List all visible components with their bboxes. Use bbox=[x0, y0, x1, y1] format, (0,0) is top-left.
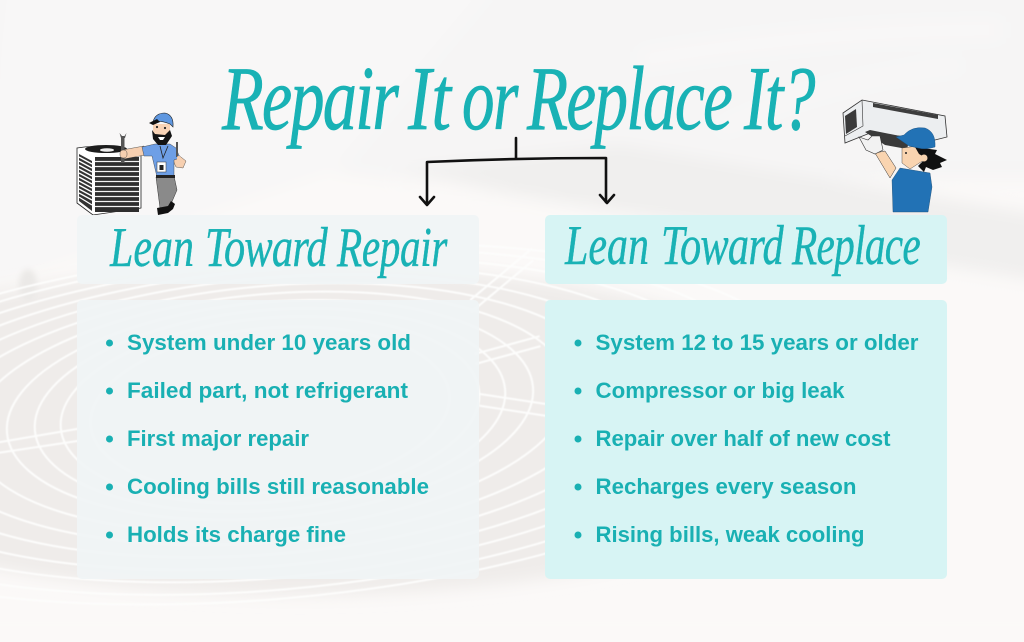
title: or bbox=[462, 50, 519, 149]
panel: lean toward replace heading bbox=[545, 215, 947, 284]
list: replace reasons: System 12 to 15 years or older bbox=[596, 330, 919, 355]
title: It? bbox=[743, 50, 815, 149]
list: replace reasons: Rising bills, weak cooling bbox=[596, 522, 864, 547]
list: repair reasons: Holds its charge fine bbox=[127, 522, 346, 547]
icon: technician with outdoor AC unit bbox=[76, 112, 186, 216]
list: repair reasons bbox=[106, 330, 429, 547]
title: Replace bbox=[526, 50, 732, 149]
list: replace reasons: Compressor or big leak bbox=[596, 378, 845, 403]
title: It bbox=[407, 50, 453, 149]
title: Repair bbox=[221, 50, 399, 149]
panel: repair reasons bbox=[77, 300, 479, 579]
list: replace reasons bbox=[574, 330, 919, 547]
panel: lean toward repair heading: Toward bbox=[205, 217, 329, 279]
list: replace reasons: Recharges every season bbox=[596, 474, 856, 499]
list: replace reasons: Repair over half of new cost bbox=[596, 426, 891, 451]
technician figure bbox=[120, 113, 186, 215]
wall AC unit bbox=[843, 100, 947, 149]
branching arrows bbox=[418, 136, 616, 206]
list: repair reasons: Cooling bills still reasonable bbox=[127, 474, 429, 499]
AC condenser unit bbox=[77, 145, 141, 215]
panel: lean toward replace heading: Lean bbox=[564, 215, 649, 277]
panel: replace reasons bbox=[545, 300, 947, 579]
title bbox=[221, 50, 816, 149]
icon: technician servicing wall AC unit bbox=[842, 100, 948, 212]
panel: lean toward repair heading bbox=[77, 215, 479, 284]
list: repair reasons: First major repair bbox=[127, 426, 309, 451]
list: repair reasons: Failed part, not refrigerant bbox=[127, 378, 409, 403]
panel: lean toward repair heading: Lean bbox=[109, 217, 194, 279]
panel: lean toward replace heading: Toward bbox=[661, 215, 785, 277]
list: repair reasons: System under 10 years old bbox=[127, 330, 411, 355]
technician figure bbox=[859, 128, 947, 212]
